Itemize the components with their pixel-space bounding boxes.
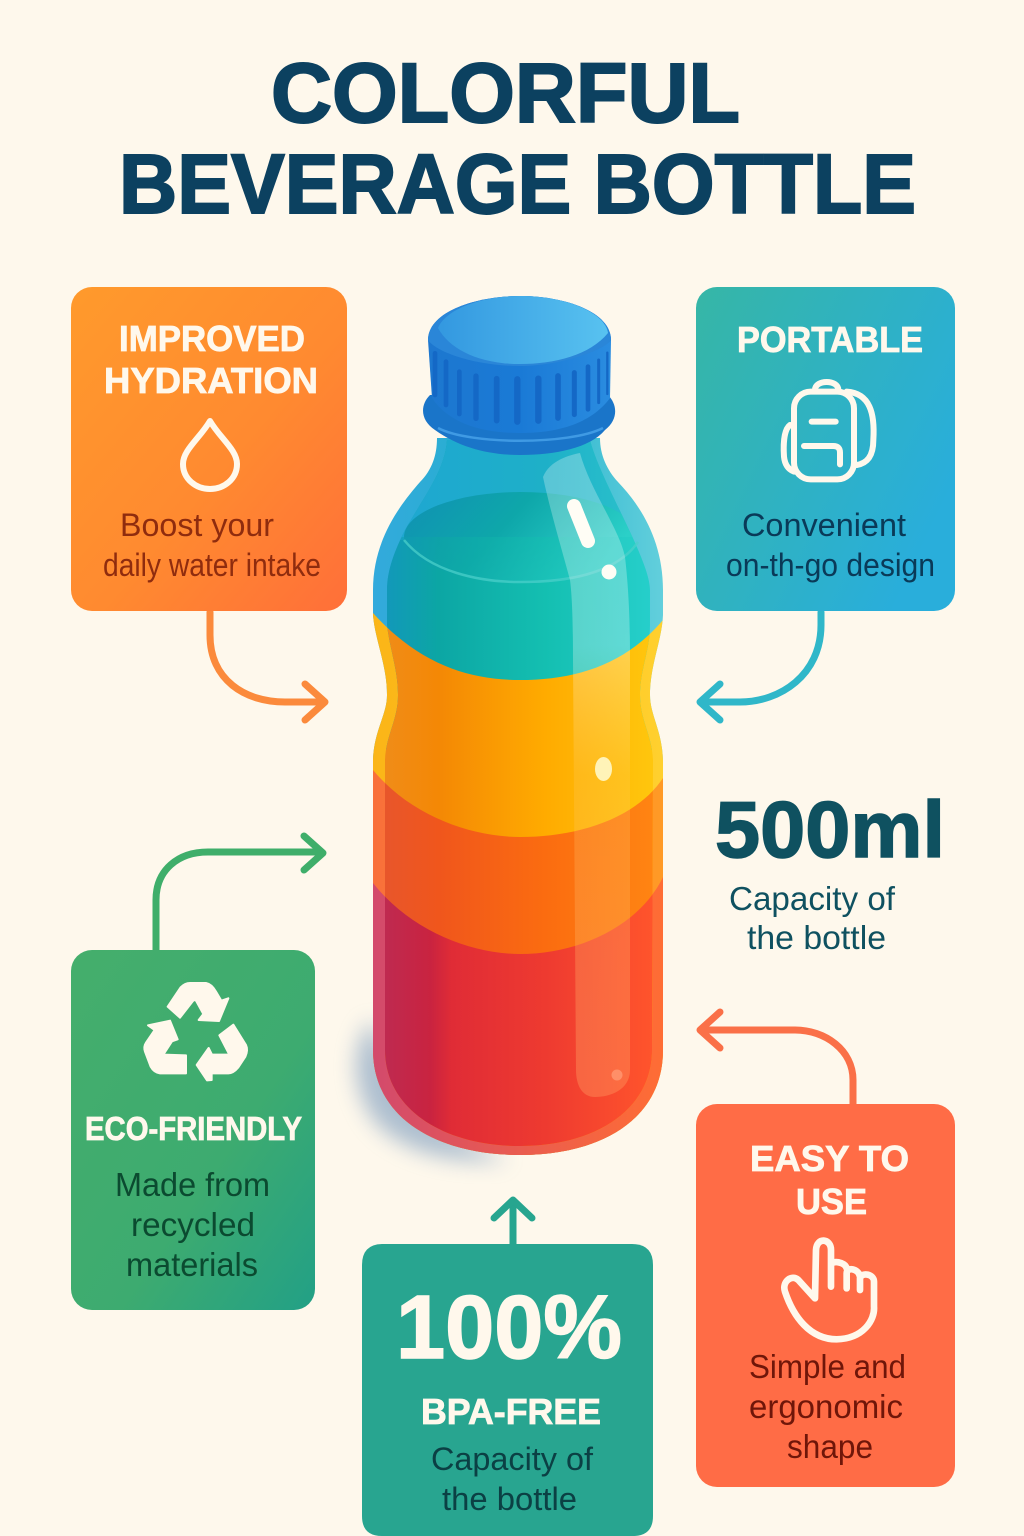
description: eco-friendly xyxy=(115,1166,270,1283)
description: portable: Convenient xyxy=(742,507,906,543)
bottle body xyxy=(373,430,663,1160)
stat: 500ml capacity: Capacity of xyxy=(729,880,896,917)
arrow: hydration to bottle xyxy=(210,612,325,720)
heading: BPA-free: BPA-FREE xyxy=(421,1391,601,1432)
heading: easy to use xyxy=(750,1138,909,1222)
heading: improved hydration: HYDRATION xyxy=(104,360,318,401)
description: easy to use: Simple and xyxy=(749,1348,906,1385)
bottle illustration xyxy=(356,296,663,1161)
panel: eco-friendly xyxy=(71,950,315,1310)
arrow: eco-friendly to bottle xyxy=(156,836,323,950)
description: easy to use xyxy=(749,1348,906,1465)
stat: 500ml capacity xyxy=(715,785,945,956)
heading: easy to use: USE xyxy=(796,1181,867,1222)
title xyxy=(119,46,916,231)
arrow: easy to use to bottle xyxy=(700,1012,853,1104)
description: hydration xyxy=(103,507,321,583)
heading: improved hydration xyxy=(104,318,318,401)
heading: portable: PORTABLE xyxy=(737,319,923,360)
bottle cap xyxy=(428,296,611,433)
title: BEVERAGE BOTTLE xyxy=(119,137,916,231)
arrow: BPA-free to bottle xyxy=(494,1200,532,1244)
liquid surface xyxy=(404,492,632,540)
heading: easy to use: EASY TO xyxy=(750,1138,909,1179)
arrow: portable to bottle xyxy=(700,612,821,720)
bottle shadow xyxy=(356,1020,510,1161)
stat: 100%: 100% xyxy=(396,1278,622,1378)
icon: pointing hand xyxy=(784,1241,874,1339)
description: portable xyxy=(726,507,935,583)
stat: 500ml capacity: 500ml xyxy=(715,785,945,874)
description: BPA-free xyxy=(431,1441,593,1517)
specular highlights xyxy=(574,506,622,1080)
panel: portable xyxy=(696,287,955,611)
description: portable: on-th-go design xyxy=(726,547,935,583)
glass highlight xyxy=(543,453,630,1097)
icon: backpack xyxy=(784,382,874,479)
heading: improved hydration: IMPROVED xyxy=(119,318,305,359)
description: BPA-free: the bottle xyxy=(442,1481,577,1517)
stat: 500ml capacity: the bottle xyxy=(747,919,886,956)
icon: recycle xyxy=(144,983,247,1080)
description: eco-friendly: materials xyxy=(126,1246,258,1283)
bottle collar xyxy=(423,395,615,455)
description: hydration: Boost your xyxy=(120,507,274,543)
description: eco-friendly: Made from xyxy=(115,1166,270,1203)
description: BPA-free: Capacity of xyxy=(431,1441,593,1477)
panel: improved hydration xyxy=(71,287,347,611)
cap ribs xyxy=(435,353,607,422)
panel: BPA-free xyxy=(362,1244,653,1536)
description: eco-friendly: recycled xyxy=(131,1206,255,1243)
title: COLORFUL xyxy=(271,46,740,140)
panel: easy to use xyxy=(696,1104,955,1487)
icon: water drop xyxy=(183,421,237,489)
description: easy to use: ergonomic xyxy=(749,1388,903,1425)
description: easy to use: shape xyxy=(787,1428,873,1465)
heading: eco-friendly: ECO-FRIENDLY xyxy=(85,1110,302,1147)
description: hydration: daily water intake xyxy=(103,547,321,583)
